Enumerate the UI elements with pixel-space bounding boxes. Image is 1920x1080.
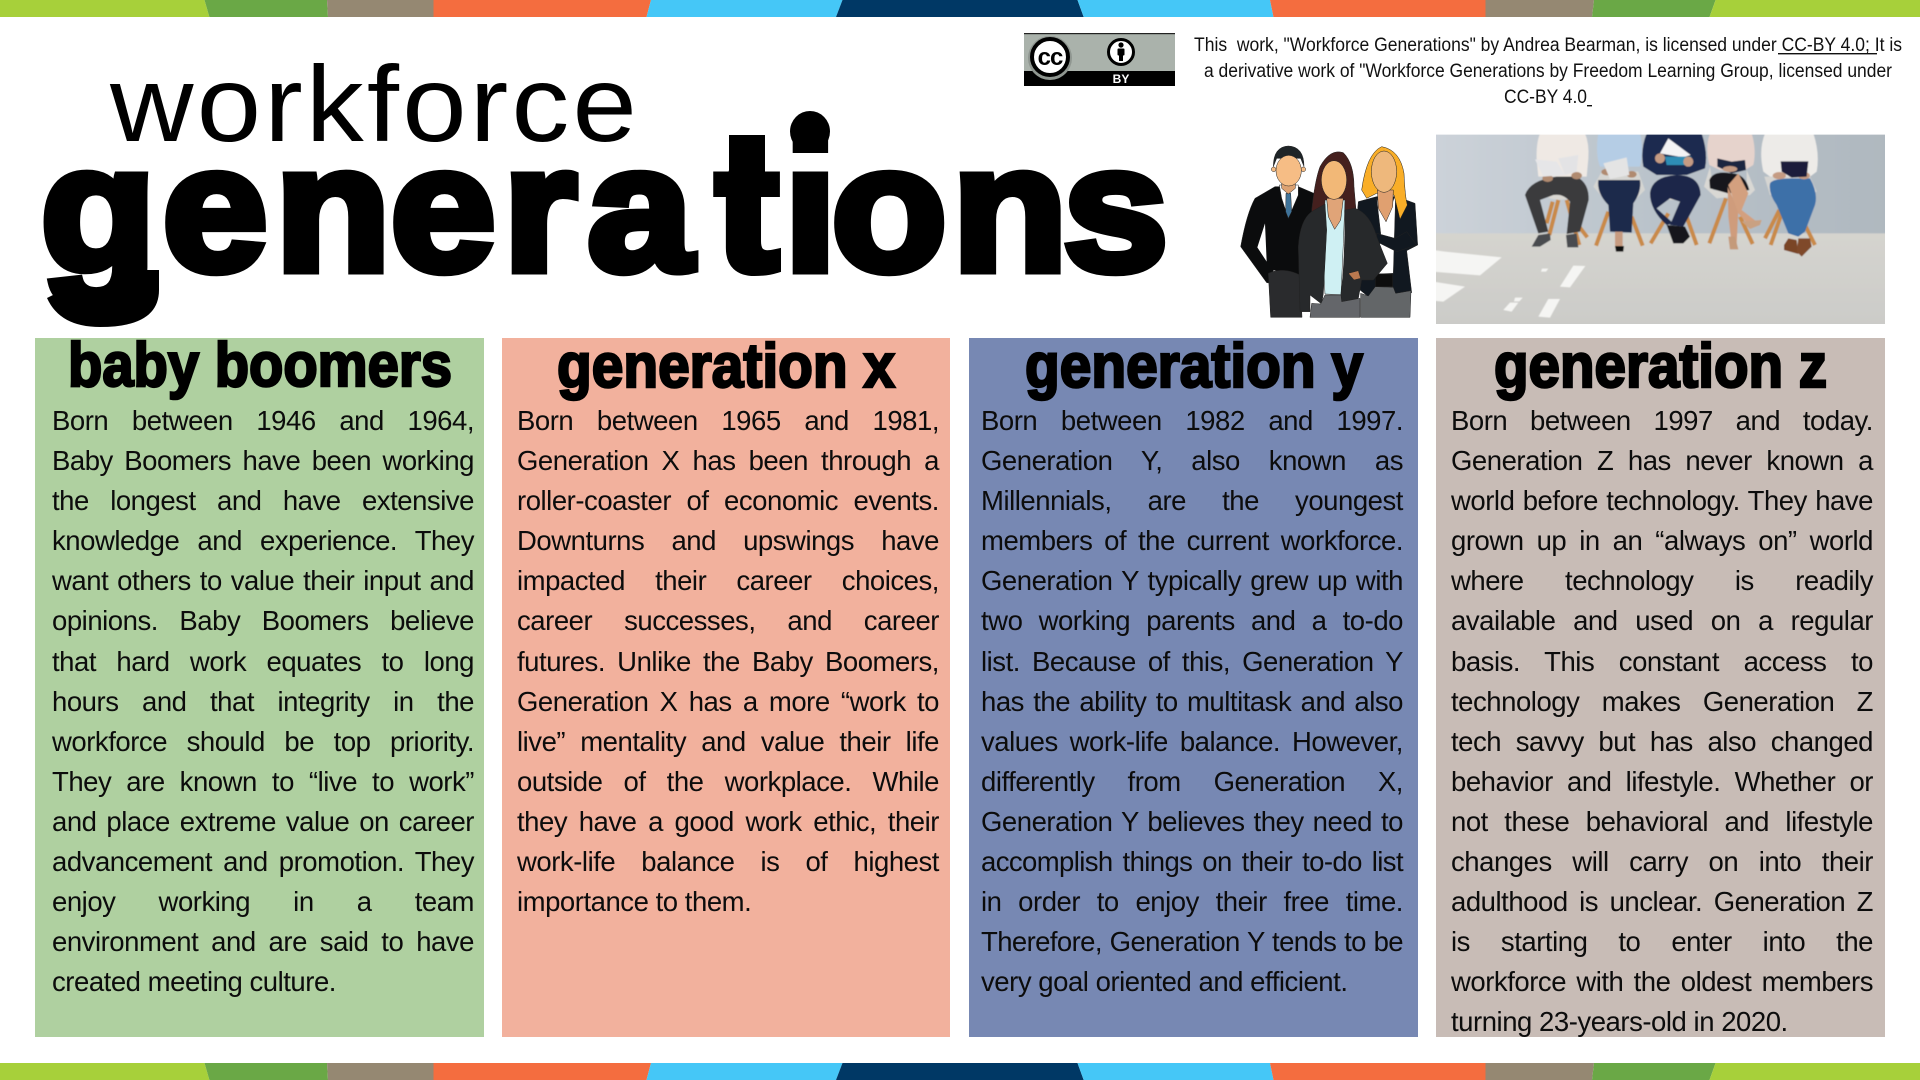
panel: generation x: [502, 338, 950, 1037]
illustration: three business people: [1240, 146, 1418, 318]
panel: baby boomers: [35, 338, 484, 1037]
text: generation z description: available and used on a regular: [1451, 605, 1873, 636]
panel: generation z: [1436, 338, 1885, 1037]
text: generation x description: importance to them.: [517, 886, 751, 917]
text: generation z description: where technology is readily: [1451, 565, 1873, 596]
text: baby boomers description: [52, 405, 474, 997]
text: generation z description: [1451, 405, 1874, 1037]
text: generation z description: workforce with the oldest members: [1451, 966, 1873, 997]
person 1: [1525, 133, 1589, 247]
text: generation x description: Generation X has a more “work to: [517, 686, 939, 717]
text: baby boomers description: advancement and promotion. They: [52, 846, 474, 877]
top colour bar: [0, 0, 1920, 17]
text: baby boomers description: knowledge and experience. They: [52, 525, 474, 556]
text: generation x description: outside of the workplace. While: [517, 766, 939, 797]
text: generation z description: changes will carry on into their: [1451, 846, 1873, 877]
text: generation z description: behavior and lifestyle. Whether or: [1451, 766, 1873, 797]
text: baby boomers description: environment and are said to have: [52, 926, 474, 957]
text: generation y description: members of the current workforce.: [981, 525, 1403, 556]
person 5: [1761, 133, 1818, 257]
text: generation z description: basis. This constant access to: [1451, 646, 1873, 677]
text: generation y description: very goal oriented and efficient.: [981, 966, 1348, 997]
heading: baby boomers: baby boomers: [68, 331, 452, 400]
text: generation y description: Generation Y believes they need to: [981, 806, 1403, 837]
panel: generation y: [969, 338, 1418, 1037]
text: generation y description: [981, 405, 1404, 997]
text: generation x description: impacted their career choices,: [517, 565, 939, 596]
icon: creative commons BY badge: cc: [1038, 44, 1063, 71]
text: generation y description: has the ability to multitask and also: [981, 686, 1403, 717]
text: generation z description: world before technology. They have: [1451, 485, 1873, 516]
text: baby boomers description: enjoy working in a team: [52, 886, 474, 917]
license text: CC-BY 4.0: [1504, 87, 1587, 108]
text: generation z description: is starting to enter into the: [1451, 926, 1873, 957]
text: baby boomers description: Baby Boomers have been working: [52, 445, 474, 476]
bottom colour bar: [0, 1063, 1920, 1080]
heading: generation x: generation x: [557, 332, 895, 401]
text: baby boomers description: Born between 1946 and 1964,: [52, 405, 474, 436]
text: generation y description: in order to enjoy their free time.: [981, 886, 1403, 917]
text: generation x description: they have a good work ethic, their: [517, 806, 939, 837]
text: baby boomers description: that hard work equates to long: [52, 646, 474, 677]
text: generation x description: [517, 405, 940, 917]
text: baby boomers description: workforce should be top priority.: [52, 726, 474, 757]
text: generation y description: list. Because of this, Generation Y: [981, 646, 1403, 677]
title: workforce: [109, 43, 640, 164]
text: generation y description: values work-life balance. However,: [981, 726, 1403, 757]
text: generation x description: career successes, and career: [517, 605, 939, 636]
text: generation x description: futures. Unlike the Baby Boomers,: [517, 646, 939, 677]
text: generation y description: Millennials, are the youngest: [981, 485, 1403, 516]
text: baby boomers description: They are known to “live to work”: [52, 766, 474, 797]
text: generation x description: Generation X has been through a: [517, 445, 939, 476]
photo: five people seated on chairs: [1436, 134, 1885, 324]
text: generation z description: Born between 1997 and today.: [1451, 405, 1873, 436]
person 3: [1642, 133, 1706, 245]
text: generation x description: Downturns and upswings have: [517, 525, 939, 556]
text: baby boomers description: want others to value their input and: [52, 565, 474, 596]
person 2: [1593, 133, 1645, 252]
text: generation y description: Therefore, Generation Y tends to be: [981, 926, 1403, 957]
text: baby boomers description: opinions. Baby Boomers believe: [52, 605, 474, 636]
text: generation z description: adulthood is unclear. Generation Z: [1451, 886, 1873, 917]
license text: [1194, 35, 1902, 108]
text: generation x description: Born between 1965 and 1981,: [517, 405, 939, 436]
text: generation z description: tech savvy but has also changed: [1451, 726, 1873, 757]
person 4: [1704, 133, 1762, 249]
icon: creative commons BY badge: [1024, 33, 1175, 86]
text: generation x description: roller-coaster of economic events.: [517, 485, 939, 516]
text: generation x description: live” mentality and value their life: [517, 726, 939, 757]
heading: generation y: generation y: [1025, 332, 1363, 401]
text: generation y description: differently from Generation X,: [981, 766, 1403, 797]
text: generation y description: Generation Y, also known as: [981, 445, 1403, 476]
text: baby boomers description: created meeting culture.: [52, 966, 336, 997]
text: generation y description: Born between 1982 and 1997.: [981, 405, 1403, 436]
text: generation z description: Generation Z has never known a: [1451, 445, 1873, 476]
icon: creative commons BY badge: BY: [1113, 72, 1129, 86]
text: generation z description: grown up in an “always on” world: [1451, 525, 1873, 556]
text: generation z description: turning 23-years-old in 2020.: [1451, 1006, 1788, 1037]
text: generation x description: work-life balance is of highest: [517, 846, 939, 877]
text: baby boomers description: and place extreme value on career: [52, 806, 474, 837]
floor light patches: [1433, 250, 1585, 318]
text: baby boomers description: hours and that integrity in the: [52, 686, 474, 717]
text: generation y description: accomplish things on their to-do list: [981, 846, 1403, 877]
text: generation y description: two working parents and a to-do: [981, 605, 1403, 636]
heading: generation z: generation z: [1494, 332, 1827, 401]
text: generation z description: technology makes Generation Z: [1451, 686, 1873, 717]
title: generations: [41, 109, 1168, 308]
text: baby boomers description: the longest and have extensive: [52, 485, 474, 516]
text: generation y description: Generation Y typically grew up with: [981, 565, 1403, 596]
text: generation z description: not these behavioral and lifestyle: [1451, 806, 1873, 837]
